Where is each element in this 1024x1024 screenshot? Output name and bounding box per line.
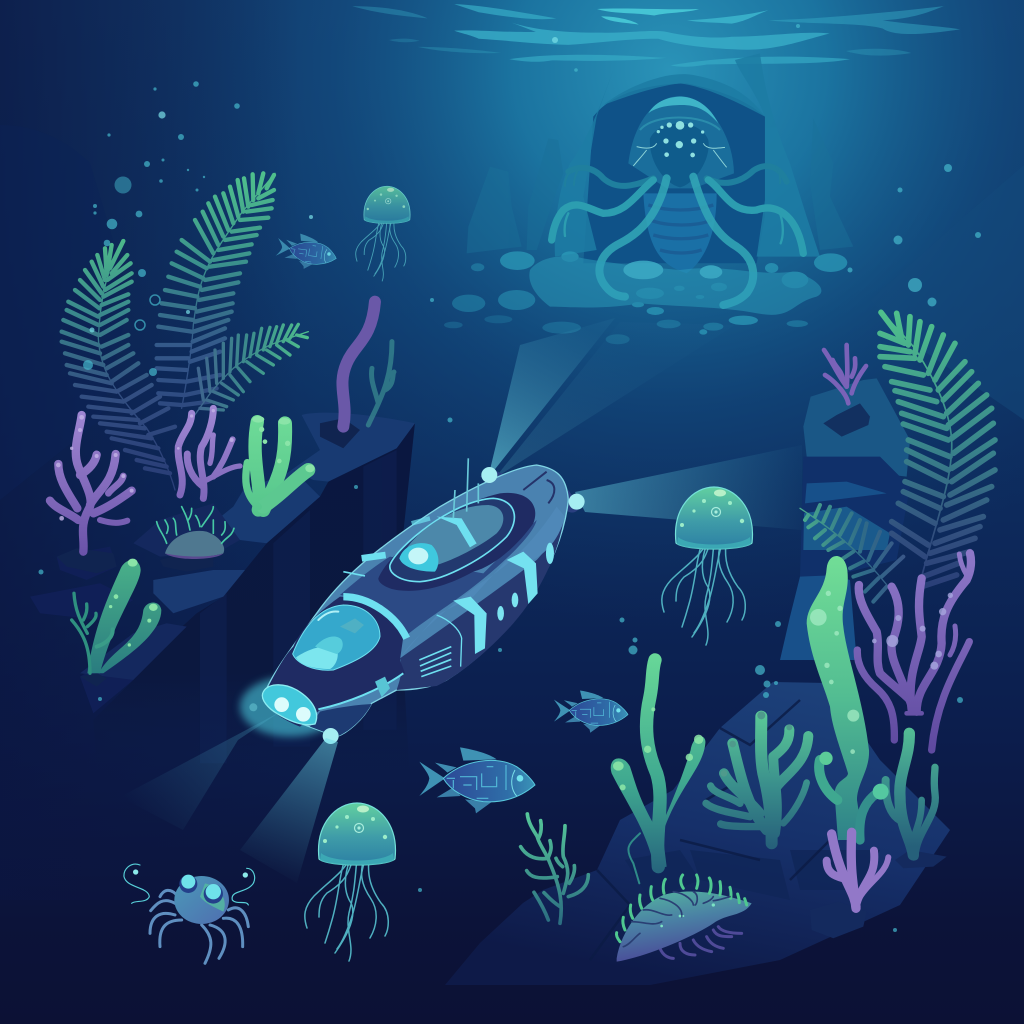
water surface ripples (352, 4, 960, 67)
jellyfish: upper small (356, 186, 410, 281)
light beams from submarine (488, 318, 802, 530)
cliff face (93, 423, 415, 823)
cockpit (293, 605, 380, 670)
fern: low branch (190, 324, 308, 422)
small pedestal (823, 403, 870, 437)
purple tube worm (342, 302, 375, 427)
purple coral far left (50, 415, 132, 552)
rock third tier (803, 507, 890, 550)
fern: low right (800, 505, 903, 602)
fern: large right (880, 312, 995, 587)
dome bow light (399, 543, 438, 572)
left corals (50, 302, 394, 673)
dark dome collar (378, 493, 535, 591)
fern: tall centre (157, 173, 275, 408)
green kelp centre (611, 660, 705, 883)
rear fins (480, 470, 580, 513)
teal coral spots (721, 711, 792, 777)
anemone (157, 507, 234, 559)
left cliff (30, 413, 415, 823)
fish: upper small (274, 231, 339, 273)
left kelp ferns (62, 173, 308, 490)
crab (124, 864, 255, 963)
purple coral bottom (827, 832, 888, 908)
pedestal under purple coral (810, 902, 867, 938)
distant creature in cave (444, 53, 853, 344)
portholes (497, 543, 554, 621)
dome (390, 498, 514, 582)
headlamp glow (240, 677, 340, 737)
green coral lower left (72, 559, 161, 673)
grill (419, 647, 451, 677)
rock fourth tier (780, 575, 857, 660)
teal coral on ledge (368, 342, 394, 425)
creature head (628, 96, 734, 188)
mid body (340, 520, 537, 637)
clamp (375, 677, 390, 697)
stern lines (523, 472, 554, 503)
pod bands (453, 552, 538, 654)
lower rear shell (310, 704, 372, 737)
green coral right (886, 733, 935, 857)
pedestals (57, 418, 360, 687)
jellyfish: bottom (305, 803, 395, 961)
shadowed low ledges (30, 547, 187, 713)
pod top strip (400, 507, 565, 658)
teal branching coral (521, 814, 588, 923)
nose hull (263, 597, 405, 727)
jellyfish: right centre (662, 487, 752, 645)
isopod (616, 875, 752, 962)
purple coral left ledge (178, 408, 240, 498)
submarine (240, 458, 585, 744)
lower ledge (80, 623, 187, 680)
headlamp (262, 685, 317, 725)
rock second tier (805, 482, 887, 503)
rock spires (467, 118, 853, 253)
dome band (437, 517, 477, 547)
small pedestal rocks (810, 850, 947, 938)
fish: medium (554, 690, 628, 733)
antennas (453, 458, 478, 518)
bottom trim (318, 673, 403, 709)
distant top-left rock (0, 125, 130, 500)
purple coral spots right (872, 593, 953, 670)
outer hull (263, 465, 568, 737)
creature tentacles (552, 166, 803, 305)
pedestal under right coral (895, 850, 947, 868)
fish: large (419, 747, 535, 813)
purple coral bottom and teal branching coral (827, 832, 888, 908)
sphere lights (249, 467, 585, 744)
purple coral spots (56, 409, 234, 521)
purple coral: right top (824, 345, 866, 403)
green tube coral (246, 416, 315, 510)
side pod (397, 517, 564, 690)
lower light beams (120, 712, 338, 883)
bottom right corals (611, 660, 935, 883)
seabed rubble (444, 251, 847, 344)
teal coral centre (706, 717, 808, 843)
teal branching coral and isopod (521, 814, 752, 962)
fern: far left (62, 241, 175, 490)
rock upper tier (803, 378, 910, 477)
large purple coral right (857, 553, 971, 750)
right rock column (780, 378, 910, 660)
low slab (133, 503, 240, 557)
upper ledge (217, 413, 415, 543)
rock dark band (800, 457, 910, 577)
distant top-right rock (870, 165, 1024, 420)
right ferns (800, 312, 995, 602)
creature body (643, 193, 717, 273)
tall green kelp (807, 556, 889, 840)
cave opening (583, 83, 765, 263)
hull bands (343, 518, 430, 638)
cave walls (555, 53, 820, 257)
middle ledge (153, 570, 245, 613)
pod seam (437, 615, 462, 667)
bottom rock mass (445, 682, 950, 985)
